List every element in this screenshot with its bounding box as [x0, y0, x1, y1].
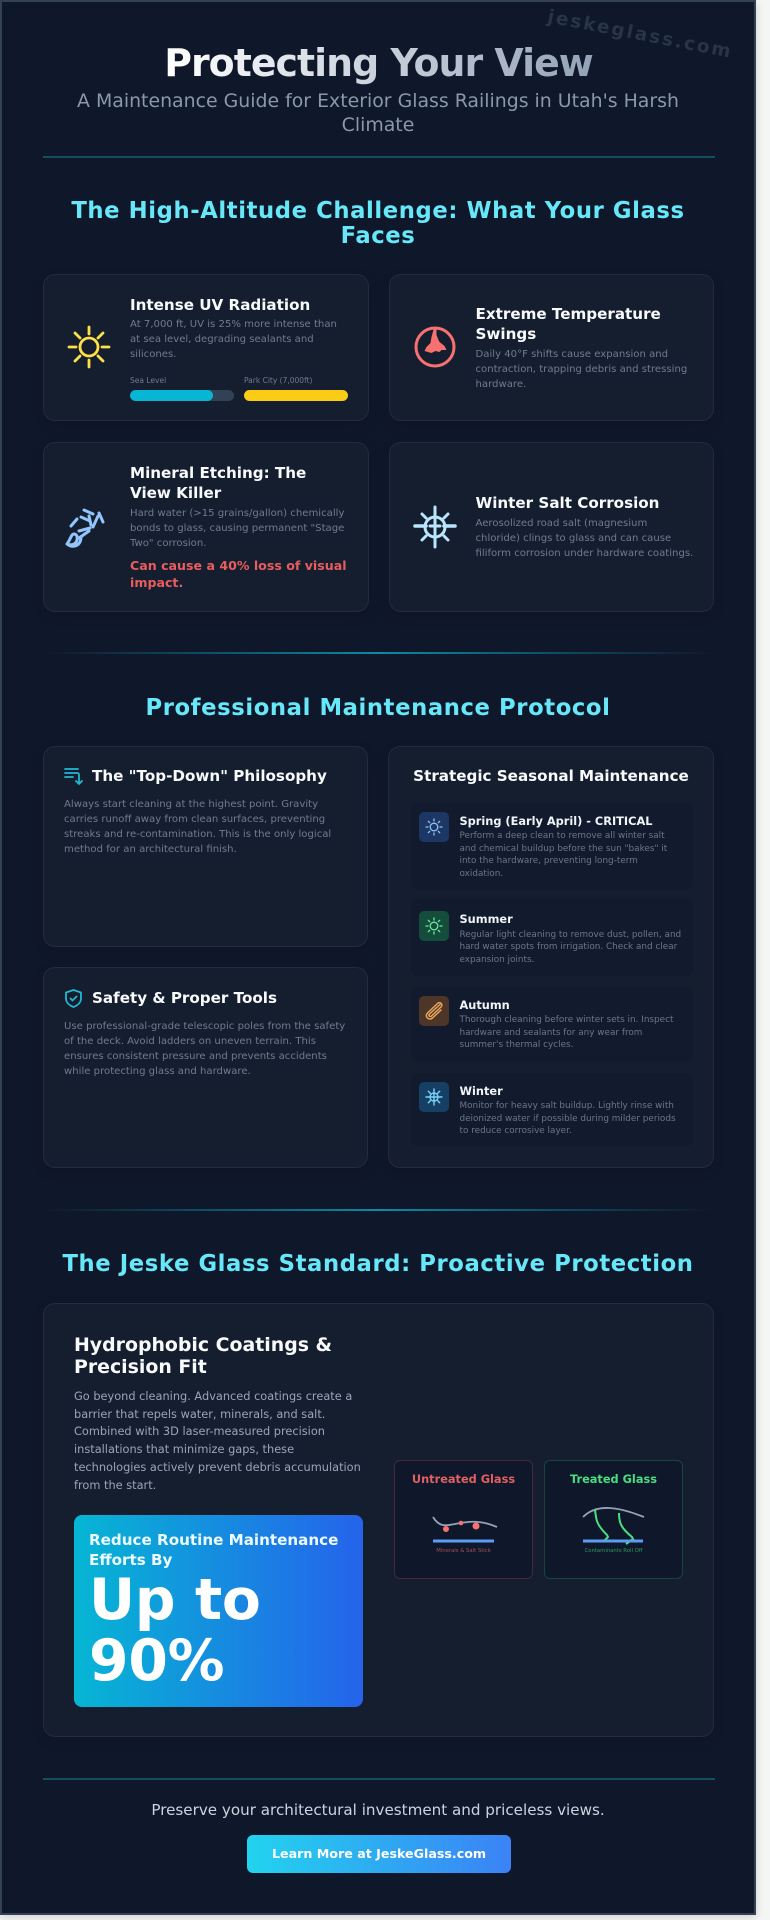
heading: high-altitude challenge [71, 198, 685, 249]
callout number [89, 1567, 261, 1694]
card text: mineral etching: Two" corrosion. [130, 538, 206, 549]
card title: temperature: Swings [476, 325, 536, 343]
card text: mineral etching [130, 508, 344, 549]
text: top-down: Always start cleaning at the highest point. Gravity [64, 798, 318, 810]
card text: UV: silicones. [130, 349, 176, 360]
card text: temperature: hardware. [476, 379, 526, 390]
panel: safety and tools [43, 967, 368, 1168]
panel: top-down philosophy [43, 746, 368, 947]
panel: seasonal maintenance [388, 746, 714, 1168]
panel: UV radiation [43, 274, 369, 421]
treated caption: Contaminants Roll Off [585, 1548, 642, 1554]
callout: visual impact: impact. [130, 575, 183, 590]
season: summer [411, 898, 693, 976]
bar: Park City [244, 390, 348, 401]
card text: winter salt: filiform corrosion under hardware coatings. [476, 548, 693, 559]
callout label: Reduce Routine Maintenance [89, 1531, 338, 1549]
subtitle: Climate [342, 114, 414, 136]
watermark: jeskeglass.com [546, 6, 735, 63]
card title: intense UV: Intense UV Radiation [130, 296, 310, 314]
card text: temperature [476, 348, 687, 390]
heading: maintenance protocol: Professional Maintenance Protocol [145, 695, 610, 721]
card text: temperature: Daily 40°F shifts cause expansion and [476, 348, 668, 360]
card text: UV: At 7,000 ft, UV is 25% more intense than [130, 319, 337, 330]
subtitle: A Maintenance Guide for Exterior Glass Railings in Utah's Harsh [77, 90, 679, 112]
card title: mineral etching: View Killer [130, 484, 221, 502]
summer text: hard water spots from irrigation. Check and clear [460, 942, 677, 952]
heading: safety: Safety & Proper Tools [92, 989, 277, 1007]
chart: UV comparison bars [130, 376, 348, 401]
spring text: into the hardware, preventing long-term [460, 856, 638, 866]
icon: mineral etching brush [65, 508, 104, 548]
card text: temperature: contraction, trapping debris and stressing [476, 364, 687, 375]
label: sea level: Sea Level [130, 376, 166, 385]
text: safety: while protecting glass and hardware. [64, 1066, 251, 1077]
text: coatings: installations that minimize gaps, these [74, 1442, 294, 1456]
icon: autumn clip [419, 996, 449, 1026]
subtitle [77, 90, 679, 136]
text: safety [64, 1020, 345, 1077]
winter text [460, 1101, 676, 1136]
card text: mineral etching: Hard water (>15 grains/gallon) chemically [130, 508, 344, 518]
panel: untreated glass [394, 1460, 533, 1579]
callout label [89, 1531, 338, 1569]
icon: shield [65, 989, 82, 1008]
title [0, 38, 756, 86]
card title: temperature: Extreme Temperature [476, 305, 661, 323]
summer text: Regular light cleaning to remove dust, pollen, and [460, 930, 681, 940]
text: coatings [74, 1389, 361, 1492]
text: top-down: carries runoff away from clean surfaces, preventing [64, 814, 325, 825]
text: coatings: from the start. [74, 1478, 156, 1492]
text: coatings: Combined with 3D laser-measured precision [74, 1424, 325, 1438]
untreated caption: Minerals & Salt Stick [436, 1548, 491, 1554]
autumn text: hardware and sealants for any wear from [460, 1028, 642, 1038]
text: safety: ensures consistent pressure and prevents accidents [64, 1051, 327, 1062]
icon: spring sun [419, 812, 449, 842]
card text: winter salt: chloride) clings to glass and can cause [476, 533, 671, 544]
summer text [460, 930, 681, 965]
title: Protecting Your View [164, 40, 593, 84]
season: autumn [411, 987, 693, 1062]
icon: temperature [414, 326, 456, 368]
icon: sun [68, 326, 110, 368]
panel: coatings [43, 1303, 714, 1737]
diagram: untreated [432, 1516, 498, 1542]
winter title: Winter [460, 1084, 503, 1098]
heading: coatings: Hydrophobic Coatings & [74, 1334, 332, 1356]
icon: summer sun [419, 911, 449, 941]
text: coatings: technologies actively prevent debris accumulation [74, 1460, 361, 1474]
autumn text: Thorough cleaning before winter sets in. Inspect [460, 1015, 673, 1025]
autumn title: Autumn [460, 998, 510, 1012]
winter text: Monitor for heavy salt buildup. Lightly rinse with [460, 1101, 674, 1111]
autumn text: summer's thermal cycles. [460, 1040, 573, 1050]
heading: high-altitude challenge: The High-Altitude Challenge: What Your Glass [71, 198, 685, 224]
diagram: treated [582, 1507, 644, 1545]
card title: mineral etching: Mineral Etching: The [130, 464, 306, 482]
panel: temperature swings [389, 274, 714, 421]
card title: temperature [476, 305, 661, 343]
spring text: and chemical buildup before the sun "bakes" it [460, 844, 667, 854]
treated title: Treated Glass [570, 1472, 657, 1486]
footer text: Preserve your architectural investment and priceless views. [151, 1800, 605, 1818]
heading: top-down: The "Top-Down" Philosophy [92, 767, 327, 785]
label: Park City: Park City (7,000ft) [244, 376, 312, 385]
card text: UV: at sea level, degrading sealants and [130, 334, 314, 345]
winter text: to reduce corrosive layer. [460, 1126, 572, 1136]
spring text: oxidation. [460, 869, 503, 879]
card title: winter salt: Winter Salt Corrosion [476, 494, 659, 512]
callout: visual impact: Can cause a 40% loss of visual [130, 558, 347, 572]
icon: winter flake [419, 1082, 449, 1112]
text: safety: of the deck. Avoid ladders on uneven terrain. This [64, 1036, 316, 1047]
heading: high-altitude challenge: Faces [341, 223, 415, 249]
callout: up to 90% [74, 1515, 363, 1707]
summer title: Summer [460, 912, 513, 926]
heading: coatings [74, 1334, 332, 1378]
heading: Jeske standard: The Jeske Glass Standard: Proactive Protection [62, 1251, 694, 1277]
icon: salt crystal [413, 506, 457, 548]
callout number: Up to [89, 1567, 261, 1633]
heading: coatings: Precision Fit [74, 1356, 207, 1378]
season: winter [411, 1073, 693, 1147]
card title: mineral etching [130, 464, 306, 502]
callout number: 90% [89, 1628, 224, 1694]
season: spring [411, 803, 693, 890]
card text: UV [130, 319, 337, 360]
callout: visual impact [130, 558, 347, 590]
heading: seasonal maintenance: Strategic Seasonal Maintenance [413, 767, 689, 785]
winter text: deionized water if possible during milder periods [460, 1114, 676, 1124]
card text: mineral etching: bonds to glass, causing permanent "Stage [130, 523, 344, 534]
autumn text [460, 1015, 674, 1050]
card text: winter salt: Aerosolized road salt (magnesium [476, 518, 647, 529]
spring title: Spring (Early April) - CRITICAL [460, 814, 652, 828]
spring text: Perform a deep clean to remove all winter salt [460, 831, 665, 841]
untreated title: Untreated Glass [412, 1472, 515, 1486]
text: top-down: streaks and re-contamination. This is the only logical [64, 829, 331, 840]
button: learn more [247, 1835, 511, 1873]
callout label: Efforts By [89, 1551, 172, 1569]
summer text: expansion joints. [460, 955, 534, 965]
text: top-down [64, 798, 331, 855]
panel: treated glass [544, 1460, 683, 1579]
spring text [460, 831, 667, 879]
panel: winter salt [389, 442, 714, 612]
button: learn more: Learn More at JeskeGlass.com [272, 1846, 486, 1861]
panel: mineral etching [43, 442, 369, 612]
text: top-down: method for an architectural finish. [64, 844, 237, 855]
bar: sea level [130, 390, 234, 401]
card text: winter salt [476, 518, 693, 559]
icon: sort down [64, 768, 83, 786]
text: safety: Use professional-grade telescopic poles from the safety [64, 1020, 345, 1032]
text: coatings: Go beyond cleaning. Advanced coatings create a [74, 1389, 352, 1403]
text: coatings: barrier that repels water, minerals, and salt. [74, 1407, 325, 1421]
